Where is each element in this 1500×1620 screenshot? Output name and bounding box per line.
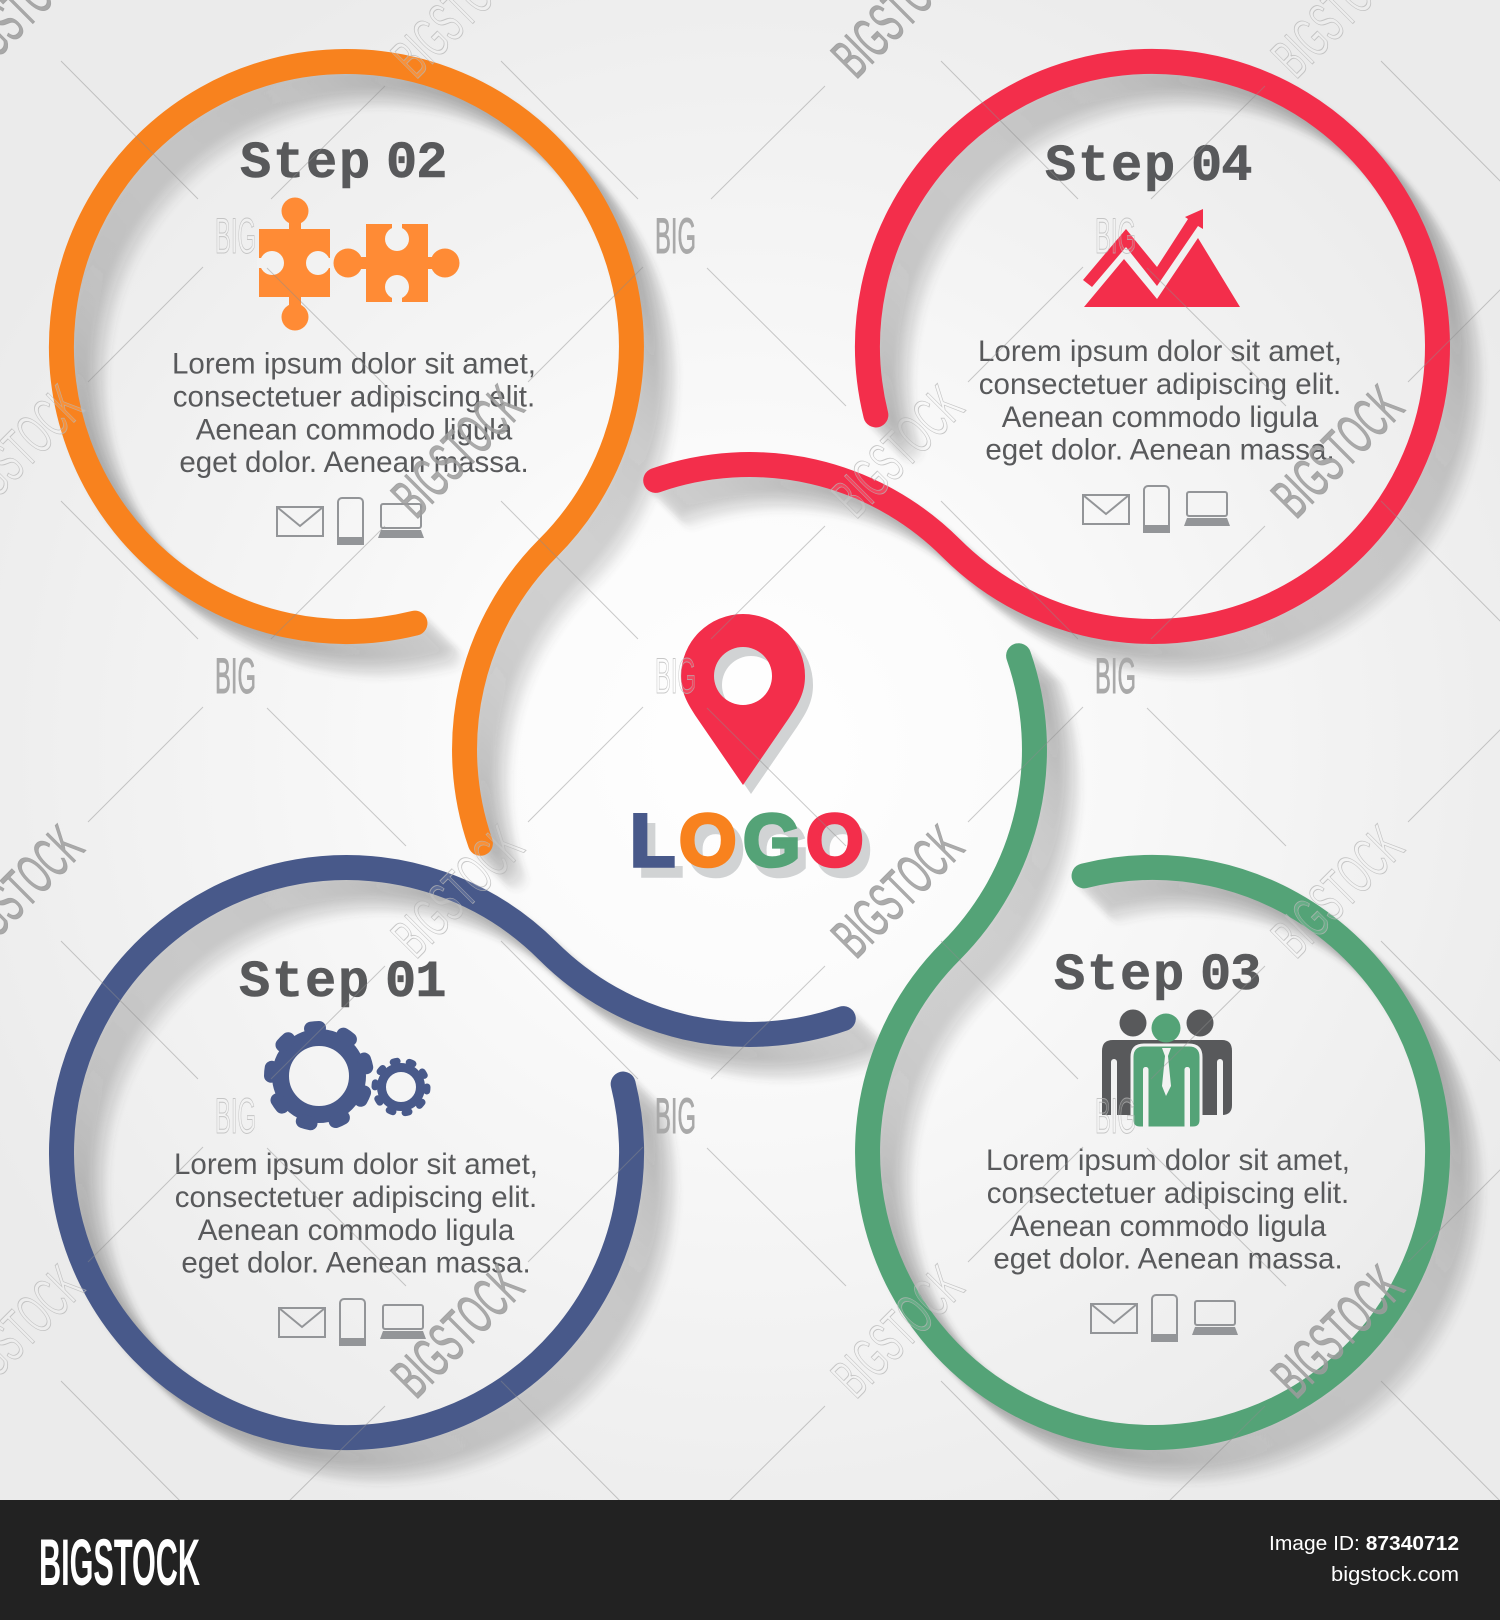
watermark text: BIG [215,1088,256,1144]
footer banner [0,1500,1500,1620]
logo wordmark: L [638,809,683,892]
text block: step 03: consectetuer adipiscing elit. [987,1177,1349,1210]
ring: step 01 blue [62,868,843,1438]
text block: step 02: Aenean commodo ligula [196,413,513,446]
logo wordmark: O [814,809,872,892]
logo wordmark: O [679,799,737,882]
text block: step 01: Aenean commodo ligula [198,1214,515,1247]
text block: step 03: Lorem ipsum dolor sit amet, [986,1144,1350,1177]
panel: step 04 [978,137,1342,532]
watermark text: BIGSTOCK [820,814,975,969]
text block: step 04: consectetuer adipiscing elit. [979,368,1341,401]
icons: mail, phone, laptop [277,498,424,544]
watermark text: BIG [655,1088,696,1144]
watermark text: BIG [215,208,256,264]
heading: step 04: 04 [1191,137,1251,196]
logo wordmark: G [751,809,809,892]
heading: step 04: Step [1045,137,1177,196]
text block: step 03: Aenean commodo ligula [1010,1210,1327,1243]
watermark text: BIGSTOCK [380,814,535,969]
heading: step 02: Step [240,134,372,193]
text block: step 04: Aenean commodo ligula [1002,401,1319,434]
center logo [630,614,872,892]
text block: step 03: eget dolor. Aenean massa. [993,1243,1343,1276]
text block: step 02: eget dolor. Aenean massa. [179,446,529,479]
icon: team of people [1102,1010,1232,1130]
logo wordmark: O [687,809,745,892]
watermark text: BIG [655,208,696,264]
heading: step 02: 02 [386,134,446,193]
heading: step 01: Step [239,953,371,1012]
icon: puzzle pieces [257,198,460,330]
text block: step 02: Lorem ipsum dolor sit amet, [172,348,536,380]
text block: step 04: eget dolor. Aenean massa. [985,434,1335,467]
footer banner: BIGSTOCK [39,1525,200,1599]
watermark text: BIG [1095,208,1136,264]
logo wordmark: G [743,799,801,882]
icons: mail, phone, laptop [1083,486,1230,532]
logo wordmark [630,799,872,892]
icon: mountain chart with arrow [1083,209,1240,307]
heading: step 03: Step [1054,946,1186,1005]
text block: step 04: Lorem ipsum dolor sit amet, [978,335,1342,368]
watermark text: BIGSTOCK [380,1254,535,1409]
watermark text: BIGSTOCK [380,374,535,529]
icons: mail, phone, laptop [1091,1295,1238,1341]
logo wordmark: L [630,799,675,882]
watermark text: BIG [655,648,696,704]
image id: Image ID: 87340712 [1269,1533,1459,1555]
text block: step 02: consectetuer adipiscing elit. [173,380,535,413]
panel: step 02 [172,134,536,544]
ring: step 03 green [868,656,1438,1437]
site url: bigstock.com [1331,1564,1459,1586]
watermark text: BIGSTOCK [820,1254,975,1409]
watermark text: BIG [215,648,256,704]
text block: step 01: consectetuer adipiscing elit. [175,1181,537,1214]
ring: step 04 red [656,61,1437,631]
watermark text: BIGSTOCK [820,374,975,529]
heading: step 01: 01 [385,953,445,1012]
ring: step 02 orange [61,62,631,843]
icons: mail, phone, laptop [279,1299,426,1345]
text block: step 01: Lorem ipsum dolor sit amet, [174,1148,538,1181]
text block: step 01: eget dolor. Aenean massa. [181,1247,531,1280]
panel: step 01 [174,953,538,1345]
watermark text: BIG [1095,1088,1136,1144]
panel: step 03 [986,946,1350,1341]
icon: gears [257,1014,427,1138]
heading: step 03: 03 [1200,946,1260,1005]
logo wordmark: O [806,799,864,882]
watermark text: BIG [1095,648,1136,704]
icon: map pin [681,614,813,794]
